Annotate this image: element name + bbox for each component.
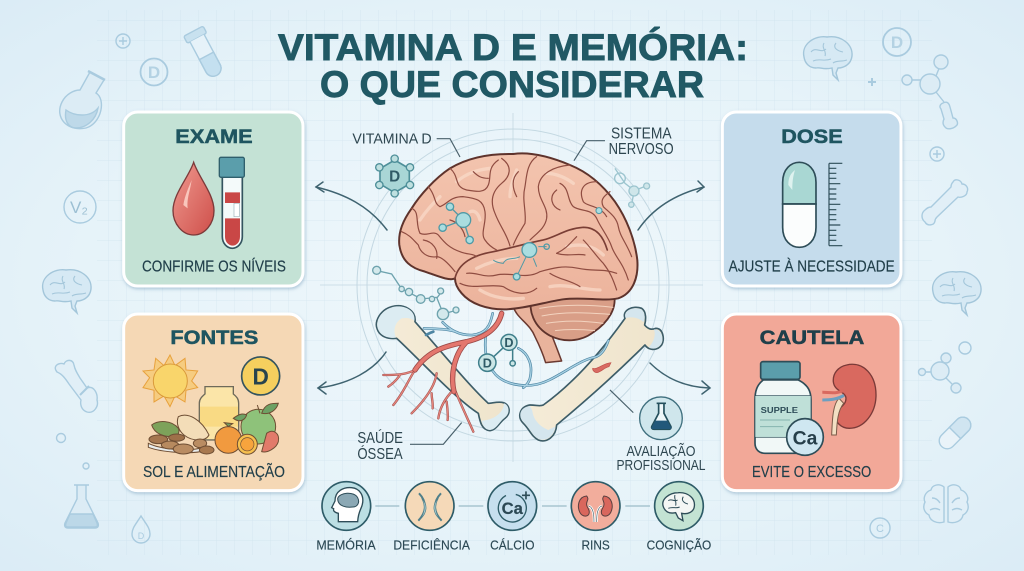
icon: test tube [219, 157, 244, 248]
D spheres [479, 334, 517, 371]
panel: Dose [722, 112, 901, 286]
icon: chain molecule left [373, 266, 459, 320]
decorative background icons: right side: D [891, 33, 903, 52]
icon: sun [143, 355, 198, 407]
labels: MEMÓRIA [316, 537, 376, 552]
title [278, 26, 748, 105]
label: Avaliação Profissional: PROFISSIONAL [616, 458, 706, 474]
decorative background icons: left side: V₂ [70, 198, 88, 217]
decorative background icons: left side [43, 26, 227, 543]
caption: SOL E ALIMENTAÇÃO [143, 464, 285, 481]
icon: rins [571, 482, 620, 530]
bone: right [520, 307, 663, 441]
brain [399, 153, 638, 309]
arrows [316, 181, 710, 394]
label: Saúde Óssea [357, 430, 403, 463]
brain stem [513, 303, 562, 363]
icon: memória [322, 482, 371, 530]
labels [316, 537, 711, 552]
red vessels [383, 313, 502, 432]
label: Avaliação Profissional [616, 443, 706, 474]
label: Sistema Nervoso: NERVOSO [609, 141, 674, 158]
bottom icon row [316, 482, 711, 552]
panel: Cautela [722, 314, 901, 491]
labels: RINS [581, 538, 610, 552]
icon: vitamin D molecule [376, 155, 414, 197]
decorative background icons: left side: D [148, 63, 160, 82]
panel: Exame [124, 112, 303, 286]
icon: faint molecule right [615, 168, 650, 207]
molecules on brain [439, 203, 602, 280]
heading: Fontes: FONTES [170, 328, 258, 349]
icon: flask circle [640, 397, 682, 440]
icon: oil jar [199, 387, 239, 440]
icon: kidney [822, 364, 876, 435]
caption: CONFIRME OS NÍVEIS [142, 259, 286, 276]
caption: AJUSTE À NECESSIDADE [729, 259, 895, 276]
cerebellum [531, 289, 615, 340]
label: Avaliação Profissional: AVALIAÇÃO [626, 443, 696, 460]
icon: vitamin D coin: D [252, 363, 269, 389]
callout lines [410, 139, 633, 444]
D spheres: D [483, 356, 492, 370]
brain folds [402, 157, 632, 293]
icon: vitamin D coin [242, 357, 280, 395]
decorative background icons: left side: D [138, 531, 145, 541]
label: Sistema Nervoso: SISTEMA [611, 126, 672, 143]
caption: EVITE O EXCESSO [752, 464, 871, 481]
icon: blood drop [173, 162, 214, 235]
icon: vitamin D molecule: D [389, 168, 400, 185]
panel: Fontes [124, 314, 303, 491]
labels: CÁLCIO [490, 537, 535, 552]
label: Saúde Óssea: ÓSSEA [357, 446, 403, 463]
icon: food group [148, 403, 279, 454]
icon: supplement bottle [755, 362, 811, 453]
decorative background icons: right side: C [876, 523, 884, 535]
icon: deficiência [405, 482, 454, 530]
icon: cognição [655, 482, 703, 530]
labels: COGNIÇÃO [647, 538, 711, 552]
icon: supplement bottle: SUPPLE [761, 406, 799, 415]
icon: capsule [783, 162, 816, 247]
brain highlights [420, 168, 603, 299]
central concept diagram [320, 113, 706, 474]
icon: calcium [787, 419, 823, 455]
title: O QUE CONSIDERAR [320, 64, 704, 105]
background rings [320, 113, 703, 462]
bone: left [376, 306, 509, 431]
icon: calcium: Ca [793, 428, 818, 449]
label: Sistema Nervoso [609, 126, 674, 158]
heading: Dose: DOSE [781, 127, 843, 148]
heading: Exame: EXAME [175, 127, 253, 148]
decorative background icons: right side [804, 28, 981, 538]
title: VITAMINA D E MEMÓRIA: [278, 26, 748, 68]
label: Saúde Óssea: SAÚDE [357, 430, 403, 447]
label: Vitamina D: VITAMINA D [352, 131, 432, 147]
D spheres: D [504, 336, 514, 350]
icon: cálcio: Ca [502, 499, 524, 518]
blue nerves [424, 313, 608, 388]
heading: Cautela: CAUTELA [760, 328, 864, 349]
icon: cálcio [488, 482, 537, 530]
labels: DEFICIÊNCIA [393, 537, 471, 552]
icon: dose scale [829, 163, 842, 246]
